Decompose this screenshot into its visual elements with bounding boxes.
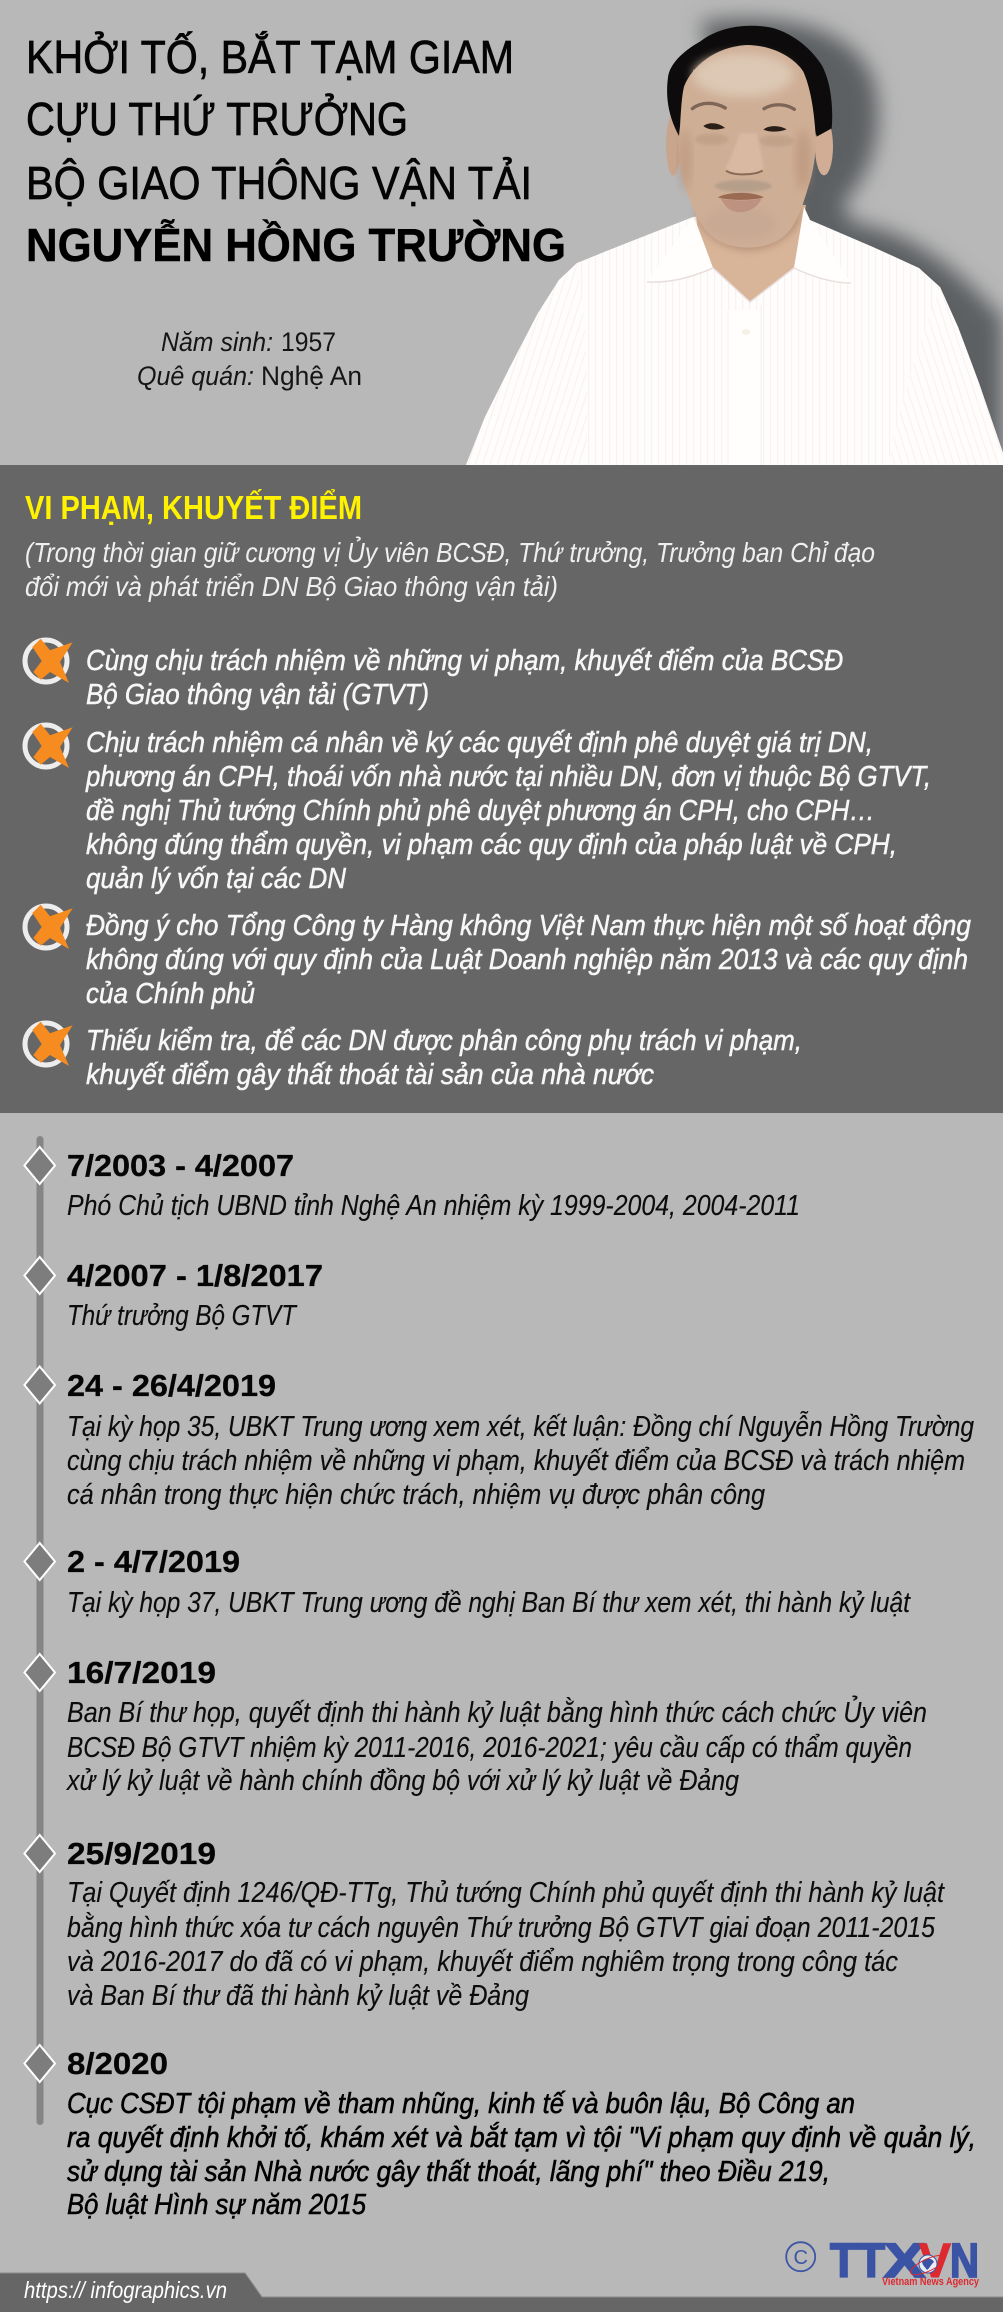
event: 25/9/2019: và Ban Bí thư đã thi hành kỷ luật về Đảng: [67, 1980, 529, 2012]
timeline: [24, 1136, 976, 2221]
violation 4: Thiếu kiểm tra, để các DN được phân công phụ trách vi phạm,: [86, 1025, 802, 1057]
collar: [647, 207, 851, 302]
event: 4/2007 - 1/8/2017: 4/2007 - 1/8/2017: [67, 1258, 323, 1293]
event: 24 - 26/4/2019: [24, 1366, 974, 1511]
violation 4: [86, 1025, 802, 1091]
icon: cross 2: [25, 724, 73, 768]
logo: TTXVN: N: [950, 2235, 979, 2288]
event: 7/2003 - 4/2007: Phó Chủ tịch UBND tỉnh Nghệ An nhiệm kỳ 1999-2004, 2004-2011: [67, 1190, 800, 1222]
portrait photo: [466, 26, 1003, 465]
event: 8/2020: [24, 2045, 976, 2221]
hair: [667, 26, 832, 137]
event: 7/2003 - 4/2007: 7/2003 - 4/2007: [67, 1148, 294, 1183]
ears: [666, 114, 681, 176]
panel subtitle: [25, 535, 875, 602]
violation 2: không đúng thẩm quyền, vi phạm các quy định của pháp luật về CPH,: [86, 829, 897, 861]
violation 2: [85, 727, 931, 895]
event: 4/2007 - 1/8/2017: Thứ trưởng Bộ GTVT: [67, 1300, 298, 1332]
footer bar: [0, 2273, 1003, 2312]
event: 24 - 26/4/2019: cá nhân trong thực hiện chức trách, nhiệm vụ được phân công: [67, 1479, 765, 1511]
eyes: [703, 123, 725, 130]
logo: TTXVN: TT: [830, 2235, 885, 2288]
event: 2 - 4/7/2019: 2 - 4/7/2019: [67, 1544, 240, 1579]
eye bags: [695, 133, 728, 145]
event: 8/2020: sử dụng tài sản Nhà nước gây thất thoát, lãng phí" theo Điều 219,: [67, 2156, 830, 2188]
nose: [725, 133, 763, 175]
name: NGUYỄN HỒNG TRƯỜNG: [26, 219, 566, 271]
personal info: Nghệ An: [261, 361, 362, 391]
moustache: [715, 180, 772, 192]
event: 16/7/2019: [24, 1654, 927, 1797]
violation 4: khuyết điểm gây thất thoát tài sản của nhà nước: [86, 1059, 654, 1091]
event: 16/7/2019: 16/7/2019: [67, 1655, 216, 1690]
logo: TTXVN: Vietnam News Agency: [882, 2276, 980, 2288]
violation 1: Bộ Giao thông vận tải (GTVT): [86, 679, 429, 711]
event: 24 - 26/4/2019: 24 - 26/4/2019: [67, 1368, 276, 1403]
source url: https:// infographics.vn: [24, 2277, 227, 2303]
event: 16/7/2019: xử lý kỷ luật về hành chính đồng bộ với xử lý kỷ luật về Đảng: [65, 1765, 739, 1797]
shirt: [466, 207, 1003, 465]
violation 2: đề nghị Thủ tướng Chính phủ phê duyệt phương án CPH, cho CPH…: [86, 795, 875, 827]
event: 4/2007 - 1/8/2017: [24, 1257, 323, 1332]
panel subtitle: (Trong thời gian giữ cương vị Ủy viên BCSĐ, Thứ trưởng, Trưởng ban Chỉ đạo: [25, 535, 875, 568]
face: [679, 45, 816, 248]
logo: TTXVN: [786, 2235, 980, 2288]
event: 25/9/2019: và 2016-2017 do đã có vi phạm, khuyết điểm nghiêm trọng trong công tác: [67, 1946, 898, 1978]
panel heading: VI PHẠM, KHUYẾT ĐIỂM: [25, 489, 362, 526]
title: CỰU THỨ TRƯỞNG: [26, 93, 408, 145]
globe: [908, 2252, 948, 2278]
violation 2: quản lý vốn tại các DN: [86, 863, 346, 895]
violation 2: phương án CPH, thoái vốn nhà nước tại nhiều DN, đơn vị thuộc Bộ GTVT,: [85, 761, 931, 793]
panel: violations: [0, 465, 1003, 1113]
eyebrows: [692, 103, 725, 109]
personal info: Năm sinh:: [161, 327, 273, 357]
event: 8/2020: Bộ luật Hình sự năm 2015: [67, 2189, 366, 2221]
title: KHỞI TỐ, BẮT TẠM GIAM: [26, 31, 514, 83]
timeline bar: [36, 1136, 44, 2125]
personal info: Quê quán:: [137, 361, 254, 391]
icon: cross 1: [25, 639, 73, 683]
event: 7/2003 - 4/2007: [24, 1147, 800, 1222]
mouth: [718, 193, 764, 200]
title: [26, 31, 566, 271]
personal info: 1957: [281, 327, 336, 357]
panel subtitle: đổi mới và phát triển DN Bộ Giao thông vận tải): [25, 571, 558, 602]
logo: TTXVN: X: [884, 2235, 925, 2288]
violation 1: Cùng chịu trách nhiệm về những vi phạm, khuyết điểm của BCSĐ: [86, 645, 843, 677]
violation 2: Chịu trách nhiệm cá nhân về ký các quyết định phê duyệt giá trị DN,: [86, 727, 873, 759]
event: 8/2020: 8/2020: [67, 2046, 168, 2081]
neck: [695, 200, 806, 302]
icon: cross 3: [25, 905, 73, 949]
copyright mark: [786, 2242, 815, 2271]
logo: TTXVN: V: [919, 2235, 951, 2288]
title: BỘ GIAO THÔNG VẬN TẢI: [26, 157, 532, 209]
copyright mark: C: [793, 2247, 808, 2269]
event: 25/9/2019: [24, 1835, 945, 2012]
icon: cross 4: [25, 1022, 73, 1066]
head: [666, 26, 833, 248]
event: 2 - 4/7/2019: [24, 1543, 911, 1619]
violation 1: [86, 645, 843, 711]
violation 3: [86, 910, 971, 1010]
portrait shadow: [700, 19, 1003, 465]
personal info: [137, 327, 362, 391]
violation 3: của Chính phủ: [86, 978, 255, 1010]
event: 25/9/2019: 25/9/2019: [67, 1836, 216, 1871]
event: 8/2020: Cục CSĐT tội phạm về tham nhũng, kinh tế và buôn lậu, Bộ Công an: [67, 2088, 855, 2120]
